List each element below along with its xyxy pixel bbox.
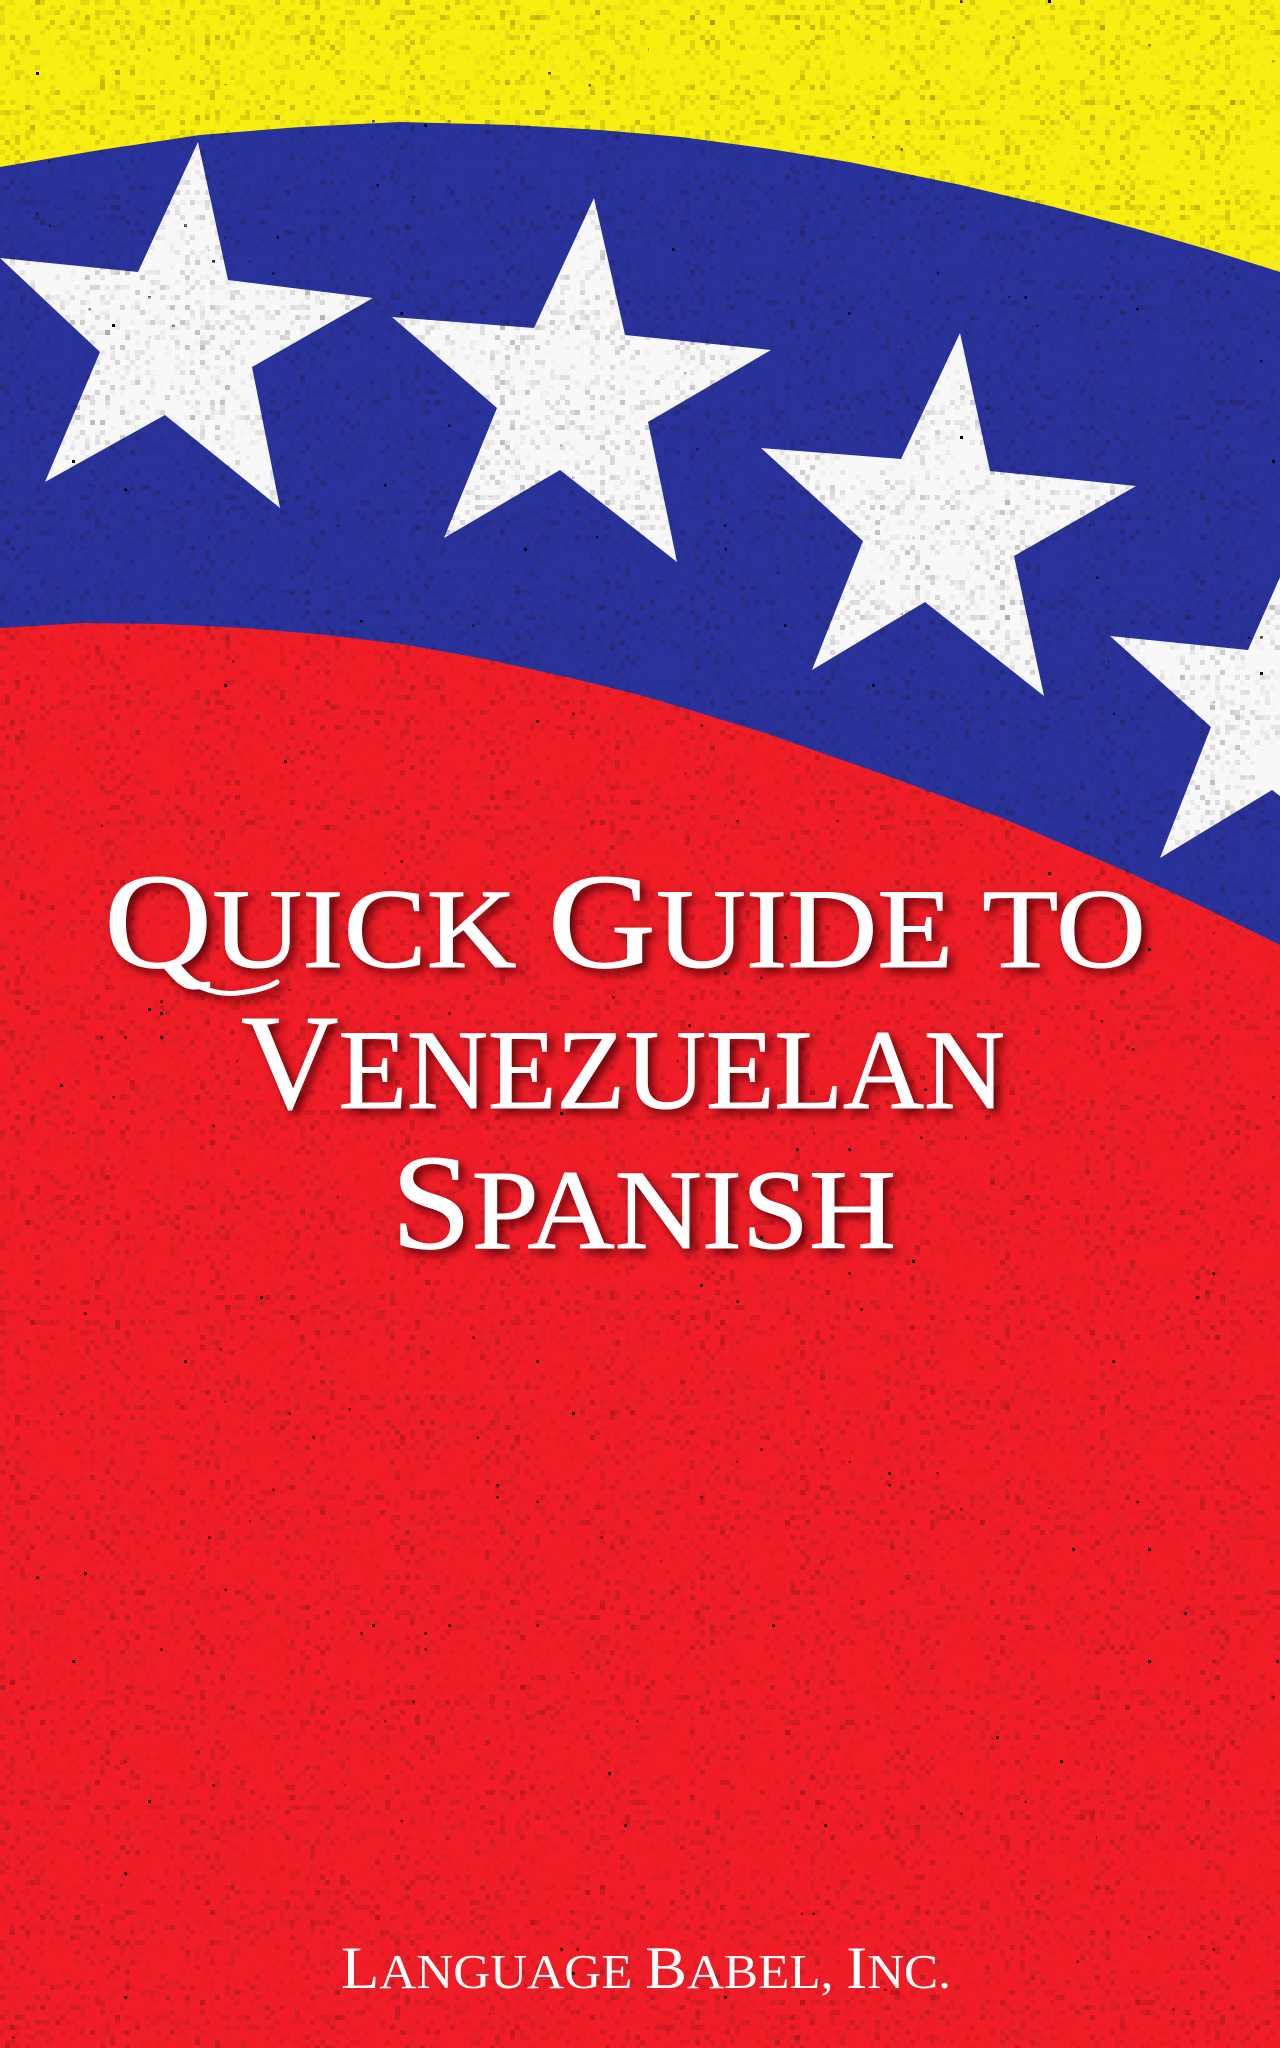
title flourish: [165, 966, 277, 993]
title line 3: SPANISH: [391, 1128, 896, 1278]
flag band: yellow: [0, 0, 1280, 320]
star 2: [392, 198, 771, 562]
title line 2: VENEZUELAN: [241, 988, 1005, 1138]
star 4: [1110, 518, 1280, 880]
star 1: [0, 142, 373, 508]
title line 1: QUICK GUIDE TO: [104, 847, 1146, 997]
stars row: [0, 142, 1280, 880]
title: [104, 847, 1146, 1278]
flag band: red: [0, 623, 1280, 2048]
star 3: [761, 333, 1136, 696]
publisher: LANGUAGE BABEL, INC.: [341, 1935, 951, 2001]
flag band: blue: [0, 122, 1280, 960]
